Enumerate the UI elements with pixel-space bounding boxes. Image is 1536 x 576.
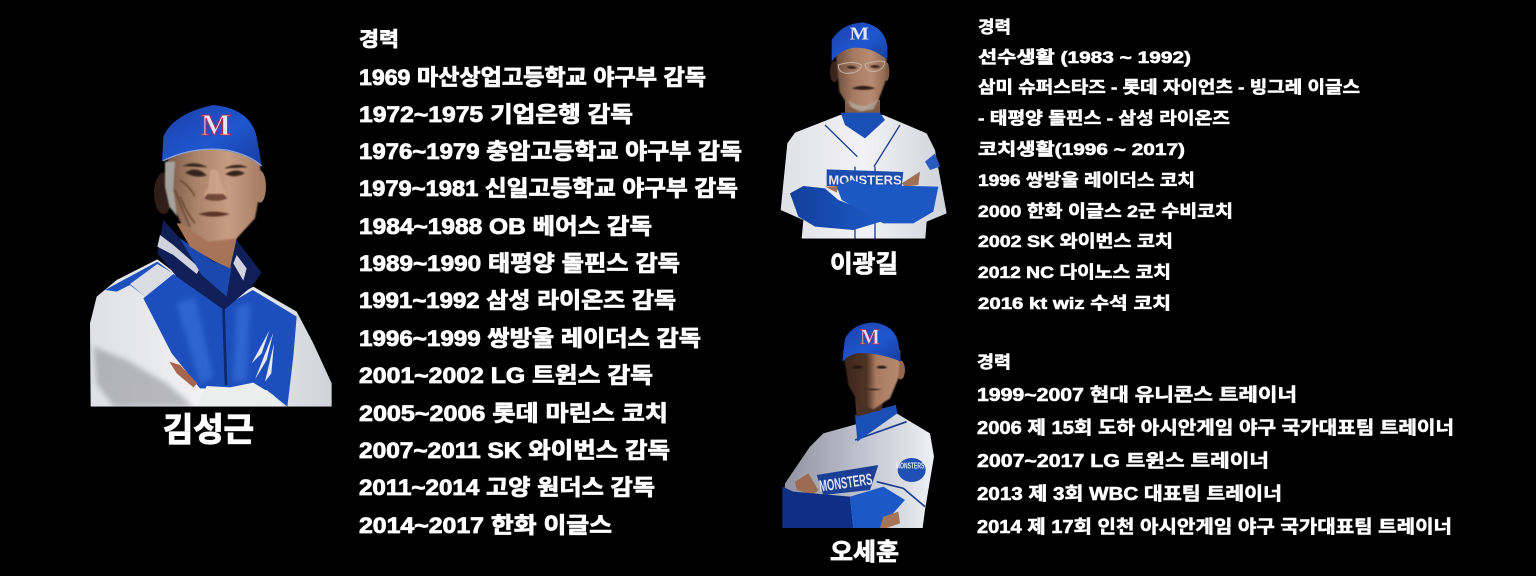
career list: 이광길: 선수생활 (1983 ~ 1992) (978, 48, 1191, 67)
career list: 김성근: 경력 (359, 28, 399, 51)
jacket body (90, 259, 332, 407)
arm lower (790, 186, 888, 230)
mouth (198, 212, 230, 217)
name: 김성근: 김성근 (163, 403, 254, 451)
photo: 오세훈 (782, 322, 934, 528)
neck (177, 223, 240, 268)
name: 이광길: 이광길 (830, 244, 898, 279)
ear right (885, 62, 890, 81)
career list: 오세훈: 2013 제 3회 WBC 대표팀 트레이너 (977, 484, 1282, 504)
placket piping (825, 125, 900, 239)
career list: 김성근 (359, 28, 742, 538)
career list: 이광길: - 태평양 돌핀스 - 삼성 라이온즈 (978, 109, 1230, 128)
career list: 이광길: 2016 kt wiz 수석 코치 (978, 294, 1171, 313)
jersey (782, 413, 934, 528)
zipper (223, 303, 226, 385)
career list: 오세훈: 1999~2007 현대 유니콘스 트레이너 (977, 385, 1297, 405)
career list: 오세훈: 2014 제 17회 인천 아시안게임 야구 국가대표팀 트레이너 (977, 517, 1452, 537)
career list: 김성근: 1979~1981 신일고등학교 야구부 감독 (359, 176, 738, 201)
face (167, 148, 262, 242)
career list: 이광길: 삼미 슈퍼스타즈 - 롯데 자이언츠 - 빙그레 이글스 (978, 78, 1360, 97)
career list: 오세훈: 2006 제 15회 도하 아시안게임 야구 국가대표팀 트레이너 (977, 418, 1454, 438)
shoulder stripe (105, 262, 172, 297)
cap crown (162, 105, 262, 166)
cheek wrinkles (175, 180, 195, 227)
cap brim edge (163, 149, 262, 166)
sleeve shading (93, 347, 193, 407)
cap logo: M (860, 324, 880, 349)
cap crown (842, 322, 901, 362)
chest highlights (177, 297, 250, 383)
face (835, 45, 887, 111)
ear right (258, 170, 266, 203)
jersey lettering (827, 169, 903, 187)
photo: 오세훈: MONSTERS (818, 471, 874, 496)
career list: 이광길: 코치생활(1996 ~ 2017) (978, 140, 1185, 159)
face (843, 350, 900, 409)
career list: 김성근: 1989~1990 태평양 돌핀스 감독 (359, 251, 680, 276)
undershirt collar (855, 405, 897, 442)
career list: 김성근: 1991~1992 삼성 라이온즈 감독 (359, 288, 676, 313)
sleeve patch (925, 153, 940, 170)
career list: 오세훈: 2007~2017 LG 트윈스 트레이너 (977, 451, 1269, 471)
career list: 오세훈 (977, 353, 1454, 537)
career list: 이광길: 2002 SK 와이번스 코치 (978, 232, 1173, 251)
career list: 이광길 (978, 18, 1360, 313)
glasses (838, 61, 885, 73)
arm upper (837, 180, 938, 223)
jersey (781, 115, 947, 239)
career list: 김성근: 1976~1979 충암고등학교 야구부 감독 (359, 139, 742, 164)
eyes and brows (183, 164, 247, 176)
ear left (154, 172, 170, 214)
collar (157, 220, 262, 310)
blue chest panel (143, 274, 297, 407)
forearm skin (825, 172, 920, 193)
photo: 오세훈: MONSTERS (896, 461, 925, 470)
name: 오세훈: 오세훈 (830, 532, 899, 567)
moustache (852, 86, 875, 90)
hand (169, 362, 197, 387)
career list: 오세훈: 경력 (977, 353, 1011, 372)
neck (855, 398, 883, 417)
undershirt collar (841, 113, 885, 138)
hand right (880, 512, 900, 528)
sleeve patch (898, 458, 926, 482)
grey beard (848, 99, 878, 112)
career list: 이광길: 2012 NC 다이노스 코치 (978, 263, 1171, 282)
cap crown (832, 22, 887, 62)
forearm dark (782, 487, 853, 528)
claw mark (252, 331, 274, 382)
photo: 이광길: MONSTERS (828, 172, 902, 187)
career list: 김성근: 1969 마산상업고등학교 야구부 감독 (359, 65, 706, 90)
photo: 김성근 (90, 105, 332, 407)
career list: 김성근: 2011~2014 고양 원더스 감독 (359, 475, 655, 500)
nose (203, 170, 228, 197)
mouth (863, 388, 882, 391)
cap logo: M (850, 23, 869, 43)
career list: 이광길: 경력 (978, 18, 1011, 37)
career list: 김성근: 2005~2006 롯데 마린스 코치 (359, 401, 668, 426)
sleeve piping (855, 422, 925, 507)
career list: 김성근: 1984~1988 OB 베어스 감독 (359, 214, 652, 239)
career list: 이광길: 1996 쌍방울 레이더스 코치 (978, 171, 1195, 190)
neck (845, 100, 880, 113)
grey hair (165, 162, 177, 217)
hand left (795, 473, 818, 495)
collar stripe (157, 235, 200, 274)
ear (896, 361, 905, 379)
eyes (852, 366, 887, 369)
career list: 김성근: 2014~2017 한화 이글스 (359, 513, 612, 538)
career list: 김성근: 1996~1999 쌍방울 레이더스 감독 (359, 326, 701, 351)
career list: 김성근: 2001~2002 LG 트윈스 감독 (359, 363, 653, 388)
jersey lettering (817, 465, 878, 495)
career list: 이광길: 2000 한화 이글스 2군 수비코치 (978, 202, 1233, 221)
white arm (197, 383, 283, 407)
ear (830, 61, 839, 82)
forearm bright (850, 487, 905, 528)
career list: 김성근: 1972~1975 기업은행 감독 (359, 102, 633, 127)
photo: 이광길 (781, 22, 947, 239)
cap logo: M (201, 108, 231, 142)
eyes (846, 65, 881, 69)
career list: 김성근: 2007~2011 SK 와이번스 감독 (359, 438, 670, 463)
